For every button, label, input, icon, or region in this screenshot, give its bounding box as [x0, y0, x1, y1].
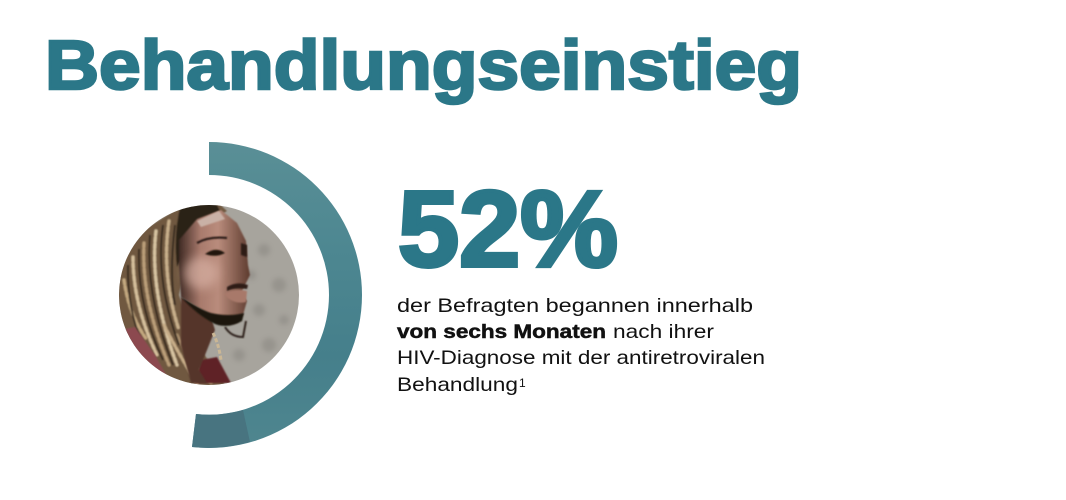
mustache and lips — [224, 283, 248, 303]
neck — [181, 297, 215, 383]
shirt — [125, 327, 231, 383]
title: Behandlungseinstieg — [45, 26, 802, 104]
donut arc: 52% — [192, 142, 362, 448]
portrait photo — [114, 199, 299, 390]
description text: 1 — [519, 376, 526, 390]
big number: 52% — [398, 168, 618, 289]
description text — [397, 295, 765, 396]
wall background — [119, 205, 299, 385]
hair — [119, 205, 228, 385]
cheek highlight — [184, 257, 218, 289]
description text: nach ihrer — [613, 321, 715, 343]
description text: von sechs Monaten — [397, 321, 606, 343]
hair strand by neck — [213, 333, 221, 360]
face — [179, 210, 250, 323]
description text: Behandlung — [397, 374, 518, 396]
description text: HIV-Diagnose mit der antiretroviralen — [397, 347, 765, 369]
forehead highlight — [197, 211, 225, 227]
beard — [181, 297, 244, 326]
eye and brow — [197, 238, 247, 257]
description text: der Befragten begannen innerhalb — [397, 295, 753, 317]
wall texture — [233, 244, 289, 361]
hair wisps under chin — [225, 321, 246, 337]
